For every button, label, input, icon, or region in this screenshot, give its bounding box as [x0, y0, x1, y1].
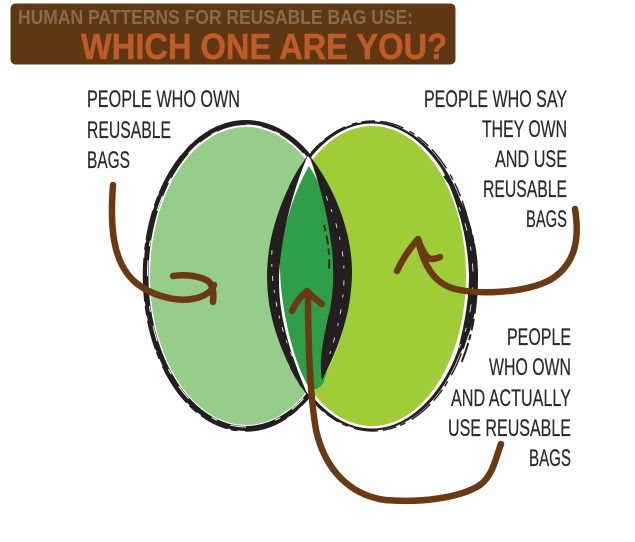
label: people who own reusable bags: [87, 86, 240, 174]
label: people who own and actually use reusable bags: PEOPLE: [507, 324, 571, 351]
arrow: to left circle: [112, 185, 214, 302]
arrow: to overlap: [292, 291, 501, 501]
label: people who say they own and use reusable bags: THEY OWN: [482, 116, 567, 143]
arrow: to right circle: [397, 209, 577, 292]
label: people who say they own and use reusable bags: BAGS: [526, 206, 567, 233]
label: people who say they own and use reusable bags: PEOPLE WHO SAY: [424, 86, 567, 113]
venn diagram: [144, 121, 478, 431]
overlap: own and actually use: [267, 155, 352, 396]
label: people who own and actually use reusable bags: AND ACTUALLY: [451, 385, 571, 412]
right circle: say they own and use: [271, 121, 478, 431]
left circle: own reusable bags: [144, 121, 348, 431]
label: people who own reusable bags: BAGS: [87, 147, 130, 174]
label: people who say they own and use reusable bags: REUSABLE: [483, 176, 567, 203]
title line 1: HUMAN PATTERNS FOR REUSABLE BAG USE:: [18, 7, 413, 29]
label: people who own reusable bags: REUSABLE: [87, 117, 171, 144]
right dark edge: [309, 155, 352, 380]
title banner: [10, 4, 456, 67]
label: people who own reusable bags: PEOPLE WHO OWN: [87, 86, 240, 113]
label: people who own and actually use reusable bags: BAGS: [529, 445, 571, 472]
label: people who say they own and use reusable bags: AND USE: [495, 146, 567, 173]
label: people who own and actually use reusable bags: USE REUSABLE: [448, 415, 571, 442]
label: people who say they own and use reusable bags: [424, 86, 567, 233]
label: people who own and actually use reusable bags: WHO OWN: [489, 354, 571, 381]
left dark edge: [267, 155, 308, 396]
title line 2: WHICH ONE ARE YOU?: [81, 26, 447, 67]
label: people who own and actually use reusable bags: [448, 324, 571, 472]
